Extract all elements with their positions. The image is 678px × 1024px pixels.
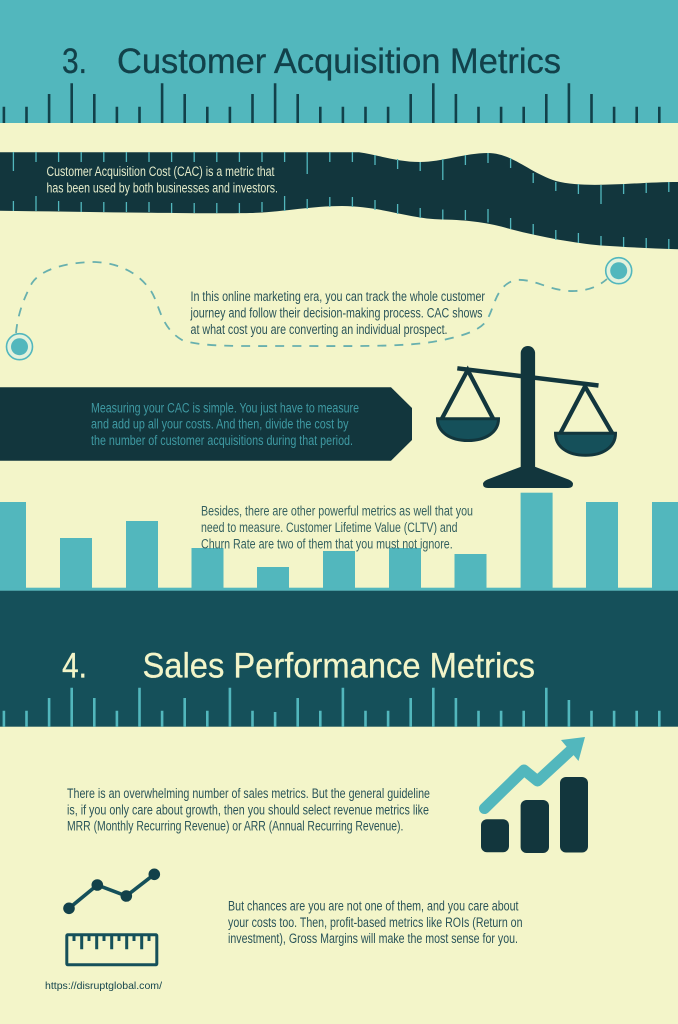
icon: growth bars with arrow bbox=[481, 737, 588, 853]
text: profit metrics: investment), Gross Margins will make the most sense for you. bbox=[228, 931, 518, 946]
text: other metrics bbox=[201, 504, 473, 551]
text: profit metrics bbox=[228, 898, 522, 946]
text: measuring CAC: the number of customer acquisitions during that period. bbox=[91, 433, 353, 448]
panel: wavy ribbon with CAC definition bbox=[0, 152, 678, 249]
bar chart bbox=[0, 493, 678, 591]
icon: balance scale bbox=[438, 346, 616, 488]
text: customer journey: In this online marketing era, you can track the whole customer bbox=[190, 289, 485, 304]
heading: section 4: Sales Performance Metrics bbox=[142, 646, 535, 685]
text: other metrics: Besides, there are other powerful metrics as well that you bbox=[201, 504, 473, 519]
text: sales metrics guideline: MRR (Monthly Recurring Revenue) or ARR (Annual Recurring Revenue). bbox=[67, 819, 403, 834]
panel: teal header bbox=[0, 0, 678, 123]
heading: section 4: 4. bbox=[62, 646, 87, 685]
text: measuring CAC: and add up all your costs. And then, divide the cost by bbox=[91, 417, 349, 432]
text: other metrics: need to measure. Customer Lifetime Value (CLTV) and bbox=[201, 520, 458, 535]
text: customer journey: at what cost you are converting an individual prospect. bbox=[190, 322, 448, 337]
dashed journey path bbox=[16, 262, 607, 346]
text: measuring CAC bbox=[91, 400, 359, 448]
text: CAC definition: Customer Acquisition Cost (CAC) is a metric that bbox=[46, 164, 275, 179]
heading: section 3: 3. bbox=[62, 42, 87, 81]
panel: dark section 4 header bbox=[0, 591, 678, 727]
text: CAC definition bbox=[46, 164, 278, 195]
source url: https://disruptglobal.com/ bbox=[45, 980, 162, 992]
text: CAC definition: has been used by both businesses and investors. bbox=[46, 180, 278, 195]
text: sales metrics guideline: There is an overwhelming number of sales metrics. But the general guideline bbox=[67, 786, 430, 801]
ruler ticks: header bbox=[4, 83, 659, 123]
icon: line chart bbox=[63, 868, 160, 914]
text: measuring CAC: Measuring your CAC is simple. You just have to measure bbox=[91, 400, 359, 415]
text: other metrics: Churn Rate are two of them that you must not ignore. bbox=[201, 536, 453, 551]
text: profit metrics: your costs too. Then, profit-based metrics like ROIs (Return on bbox=[228, 915, 522, 930]
icon: left journey marker bbox=[6, 334, 32, 360]
ruler ticks: section 4 bbox=[4, 688, 659, 727]
text: customer journey: journey and follow their decision-making process. CAC shows bbox=[190, 305, 483, 320]
ruler ticks: ribbon bbox=[13, 152, 669, 249]
icon: right journey marker bbox=[606, 258, 632, 284]
panel: dark arrow banner bbox=[0, 387, 412, 461]
text: sales metrics guideline: is, if you only care about growth, then you should select revenue metrics like bbox=[67, 802, 429, 817]
text: profit metrics: But chances are you are not one of them, and you care about bbox=[228, 898, 519, 913]
heading: section 3: Customer Acquisition Metrics bbox=[117, 42, 561, 81]
icon: ruler bbox=[67, 935, 157, 965]
text: sales metrics guideline bbox=[67, 786, 430, 834]
text: customer journey bbox=[190, 289, 485, 337]
